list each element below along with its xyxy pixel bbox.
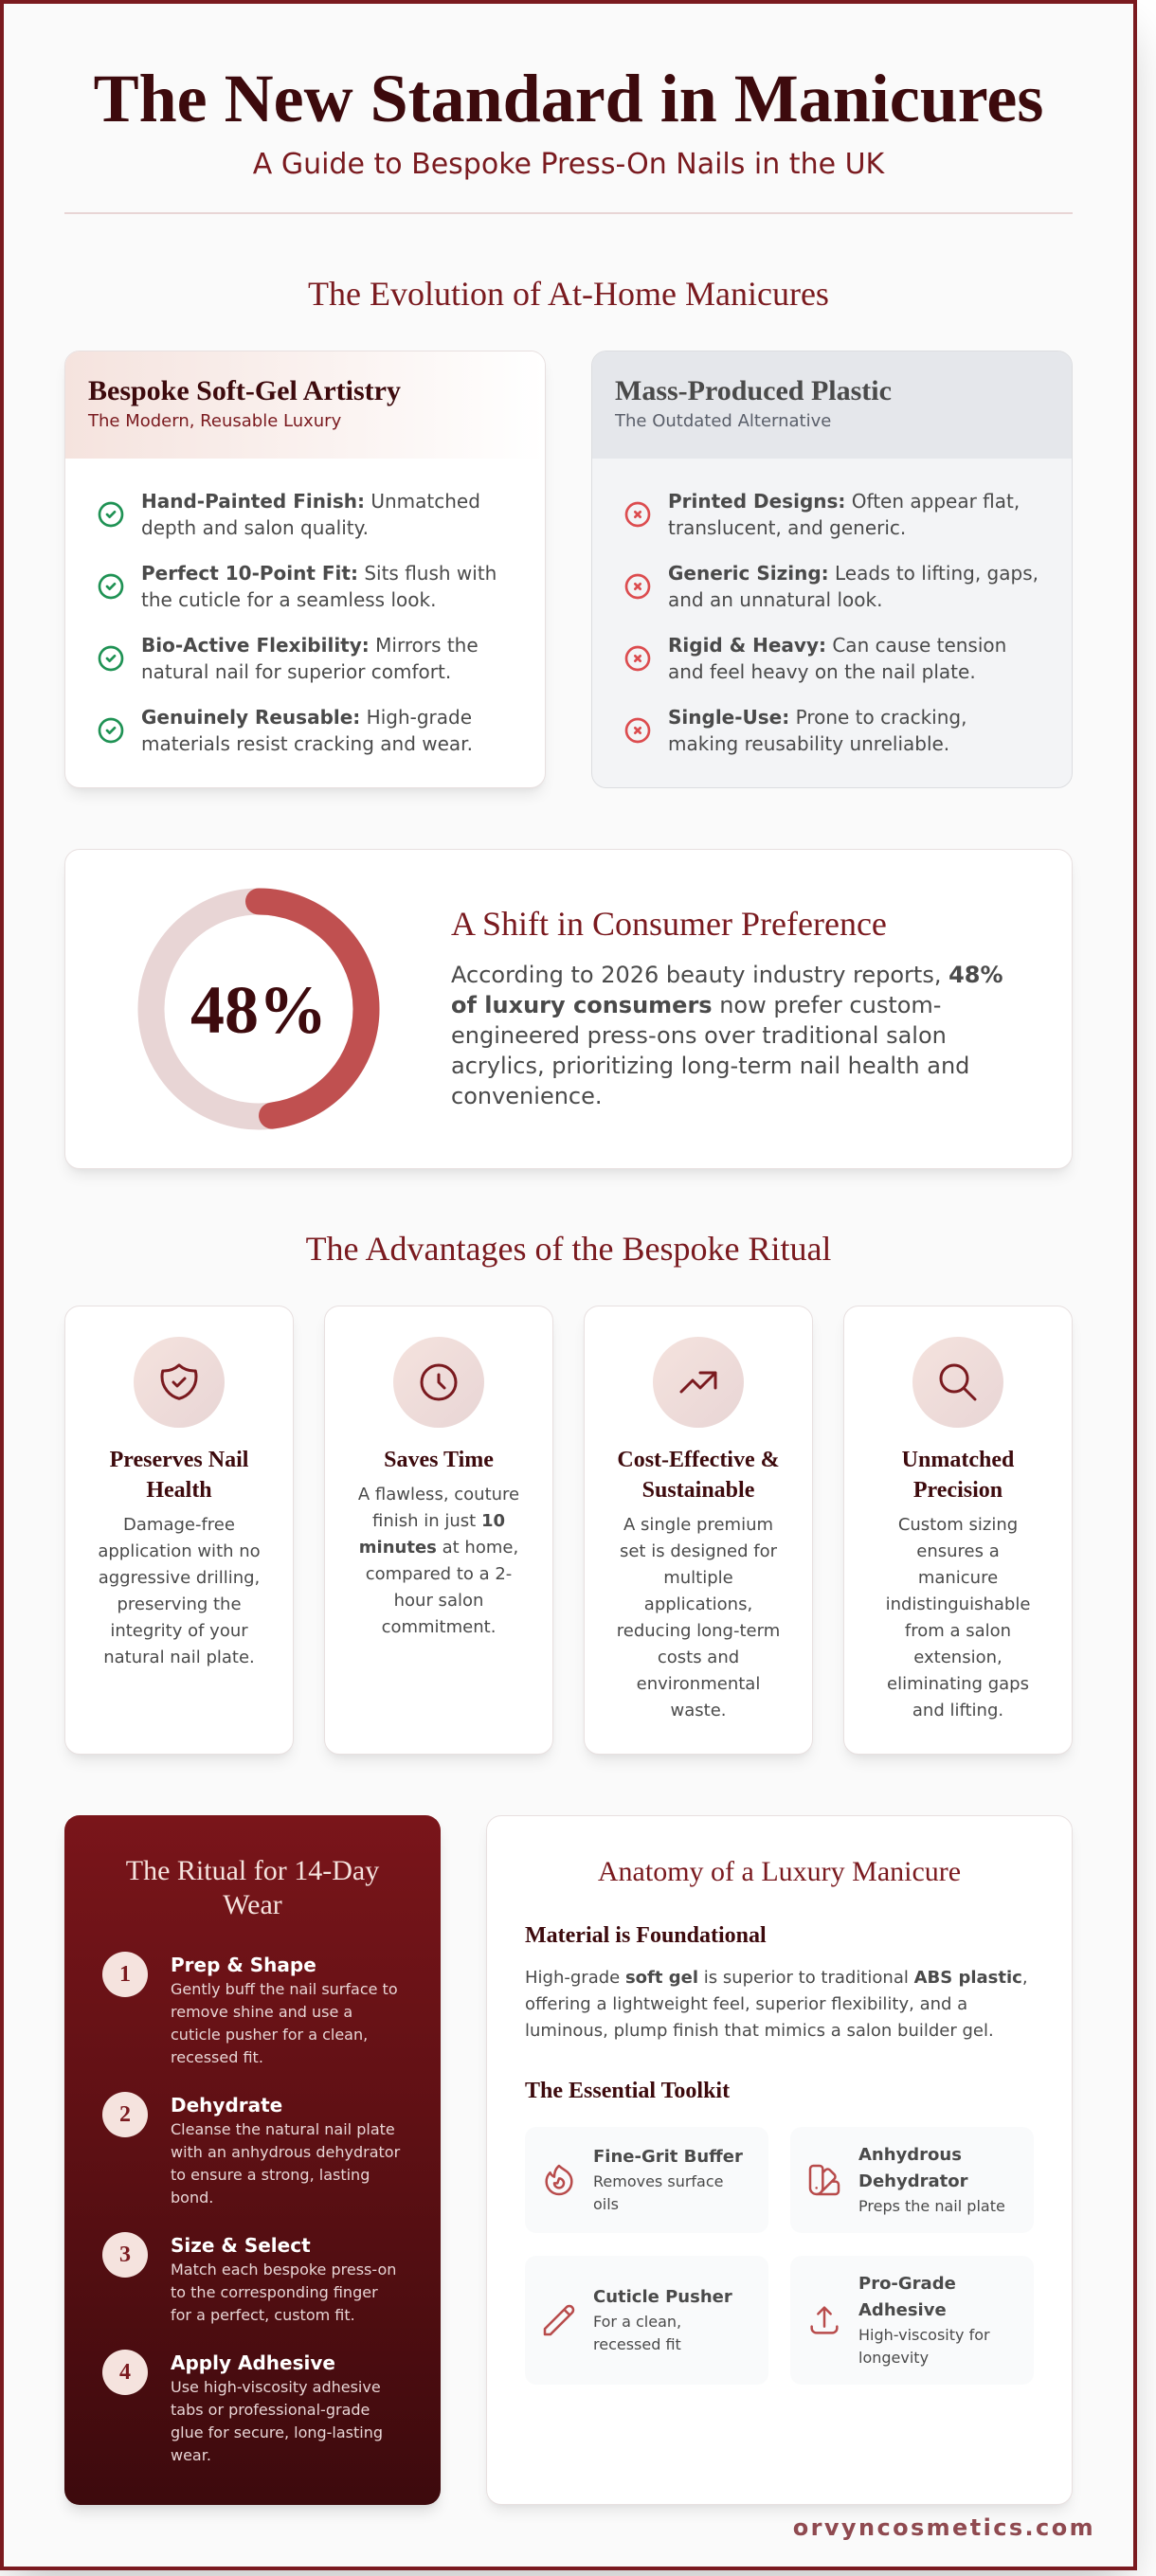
advantage text: reducing long-term xyxy=(617,1621,780,1641)
advantage card: nail health xyxy=(64,1306,294,1755)
panel: ritual steps: cuticle pusher for a clean, xyxy=(171,2026,368,2044)
anatomy heading: Anatomy of a Luxury Manicure xyxy=(598,1856,961,1887)
icon: clock xyxy=(393,1337,484,1428)
title: The New Standard in Manicures xyxy=(94,61,1043,136)
panel: ritual steps: to ensure a strong, lasting xyxy=(171,2166,370,2184)
advantage text: environmental xyxy=(637,1674,760,1694)
drawback: rigid: and feel heavy on the nail plate. xyxy=(668,660,976,683)
panel: ritual steps: glue for secure, long-lasting xyxy=(171,2423,383,2441)
benefit: reusable: Genuinely Reusable: High-grade xyxy=(141,706,472,729)
drawback: single-use xyxy=(625,706,966,755)
step 4 xyxy=(102,2350,383,2464)
advantage text xyxy=(358,1485,519,1637)
advantage title: Unmatched xyxy=(902,1448,1014,1472)
drawback: sizing: Generic Sizing: Leads to lifting, gaps, xyxy=(668,562,1039,585)
step 1 xyxy=(102,1952,398,2066)
advantage title: Sustainable xyxy=(642,1478,754,1503)
bespoke header xyxy=(65,351,545,459)
tool: cuticle pusher: Cuticle Pusher xyxy=(593,2287,732,2307)
stat text: engineered press-ons over traditional salon xyxy=(451,1022,947,1049)
benefit: flexibility xyxy=(99,634,479,683)
advantage title xyxy=(110,1448,248,1503)
plastic header xyxy=(592,351,1072,459)
advantage text: compared to a 2- xyxy=(366,1564,512,1584)
tool: adhesive: Adhesive xyxy=(858,2300,947,2320)
tool: buffer xyxy=(525,2127,768,2233)
advantage title xyxy=(617,1448,780,1503)
drawback: printed: translucent, and generic. xyxy=(668,516,906,539)
tool: buffer: Fine-Grit Buffer xyxy=(593,2147,743,2167)
material heading: Material is Foundational xyxy=(525,1923,767,1948)
panel: ritual steps: 4 xyxy=(119,2360,131,2385)
advantage text: indistinguishable xyxy=(886,1594,1030,1614)
donut chart 48% xyxy=(138,889,379,1129)
advantage text: hour salon xyxy=(394,1591,483,1611)
drawback: printed xyxy=(625,490,1020,539)
advantage text: preserving the xyxy=(117,1594,242,1614)
advantage text: Damage-free xyxy=(123,1515,235,1535)
benefit: reusable: materials resist cracking and wear. xyxy=(141,732,473,755)
panel: ritual steps: Size & Select xyxy=(171,2234,311,2257)
material text: High-grade soft gel is superior to traditional ABS plastic, xyxy=(525,1968,1028,1988)
advantage text: integrity of your xyxy=(110,1621,248,1641)
tool: cuticle pusher: For a clean, xyxy=(593,2313,681,2331)
material text: offering a lightweight feel, superior flexibility, and a xyxy=(525,1994,967,2014)
advantage text: A single premium xyxy=(623,1515,773,1535)
advantage card: cost-effective xyxy=(584,1306,813,1755)
panel: ritual steps: remove shine and use a xyxy=(171,2003,352,2021)
advantage text: set is designed for xyxy=(620,1541,777,1561)
benefit: hand-painted: depth and salon quality. xyxy=(141,516,369,539)
icon: shield xyxy=(134,1337,225,1428)
advantage text: costs and xyxy=(658,1648,739,1667)
tool: adhesive xyxy=(790,2256,1034,2385)
advantage text: natural nail plate. xyxy=(103,1648,255,1667)
advantage text: manicure xyxy=(918,1568,998,1588)
heading: advantages: The Advantages of the Bespoke Ritual xyxy=(306,1230,831,1268)
tool: adhesive: High-viscosity for xyxy=(858,2326,990,2344)
advantage text: from a salon xyxy=(905,1621,1011,1641)
tool: buffer: Removes surface xyxy=(593,2172,723,2190)
advantage text: A flawless, couture xyxy=(358,1485,519,1504)
benefit: reusable xyxy=(99,706,473,755)
advantage text: commitment. xyxy=(382,1617,496,1637)
drawback: single-use: Single-Use: Prone to cracking, xyxy=(668,706,966,729)
benefit: hand-painted xyxy=(99,490,480,539)
ritual heading: The Ritual for 14-Day xyxy=(126,1855,379,1886)
advantage title: Cost-Effective & xyxy=(617,1448,780,1472)
drawback: rigid xyxy=(625,634,1006,683)
advantage text: Custom sizing xyxy=(898,1515,1018,1535)
panel: ritual steps: Use high-viscosity adhesive xyxy=(171,2378,381,2396)
benefit: hand-painted: Hand-Painted Finish: Unmatched xyxy=(141,490,480,513)
ritual heading xyxy=(126,1855,379,1920)
ritual heading: Wear xyxy=(223,1889,282,1920)
advantage text: multiple xyxy=(663,1568,733,1588)
icon: trending up xyxy=(653,1337,744,1428)
advantage text: waste. xyxy=(671,1701,726,1720)
benefit: flexibility: Bio-Active Flexibility: Mirrors the xyxy=(141,634,479,657)
panel: ritual steps: Prep & Shape xyxy=(171,1954,316,1976)
benefit: perfect fit: the cuticle for a seamless look. xyxy=(141,588,436,611)
advantage text: and lifting. xyxy=(912,1701,1003,1720)
tool: cuticle pusher xyxy=(525,2256,768,2385)
panel: ritual steps: for a perfect, custom fit. xyxy=(171,2306,355,2324)
advantage text: ensures a xyxy=(916,1541,1000,1561)
tool: dehydrator: Anhydrous xyxy=(858,2145,962,2165)
material text xyxy=(525,1968,1028,2041)
panel: ritual steps: to the corresponding finger xyxy=(171,2283,378,2301)
advantage text: extension, xyxy=(913,1648,1002,1667)
advantage title xyxy=(902,1448,1014,1503)
tool: adhesive: Pro-Grade xyxy=(858,2274,956,2294)
advantage text: applications, xyxy=(644,1594,752,1614)
tool: cuticle pusher: recessed fit xyxy=(593,2335,681,2353)
plastic header: Mass-Produced Plastic xyxy=(615,375,892,406)
advantage title: Health xyxy=(146,1478,212,1503)
heading: evolution: The Evolution of At-Home Manicures xyxy=(308,275,829,313)
drawback: rigid: Rigid & Heavy: Can cause tension xyxy=(668,634,1006,657)
drawback: printed: Printed Designs: Often appear flat, xyxy=(668,490,1020,513)
benefit: perfect fit: Perfect 10-Point Fit: Sits flush with xyxy=(141,562,497,585)
plastic header: The Outdated Alternative xyxy=(615,411,831,431)
panel: ritual steps: Dehydrate xyxy=(171,2094,282,2117)
stat text: According to 2026 beauty industry reports, 48% xyxy=(451,962,1003,988)
panel: ritual steps: wear. xyxy=(171,2446,211,2464)
step 2 xyxy=(102,2092,400,2207)
bespoke header: Bespoke Soft-Gel Artistry xyxy=(88,375,401,406)
subtitle: A Guide to Bespoke Press-On Nails in the UK xyxy=(253,148,884,181)
panel: bespoke soft-gel artistry xyxy=(64,351,546,788)
advantage title: Preserves Nail xyxy=(110,1448,248,1472)
panel: ritual steps: 1 xyxy=(119,1962,131,1987)
tool: dehydrator xyxy=(790,2127,1034,2233)
panel: ritual steps: bond. xyxy=(171,2189,213,2207)
advantage text: eliminating gaps xyxy=(887,1674,1029,1694)
advantage title: Precision xyxy=(913,1478,1002,1503)
panel: ritual steps: tabs or professional-grade xyxy=(171,2401,370,2419)
panel: ritual steps xyxy=(64,1815,441,2505)
advantage card: saves time xyxy=(324,1306,553,1755)
advantage text: aggressive drilling, xyxy=(99,1568,260,1588)
tool: adhesive: longevity xyxy=(858,2349,929,2367)
advantage text xyxy=(617,1515,780,1720)
bespoke header: The Modern, Reusable Luxury xyxy=(88,411,341,431)
tool: buffer: oils xyxy=(593,2195,619,2213)
advantage text xyxy=(98,1515,261,1667)
benefit: perfect fit xyxy=(99,562,497,611)
drawback: sizing xyxy=(625,562,1039,611)
advantage text: finish in just 10 xyxy=(372,1511,505,1531)
icon: magnifier xyxy=(912,1337,1003,1428)
panel: consumer preference stat xyxy=(64,849,1073,1169)
panel: ritual steps: Cleanse the natural nail plate xyxy=(171,2120,395,2138)
advantage text: application with no xyxy=(98,1541,261,1561)
stat text: convenience. xyxy=(451,1083,603,1109)
panel: anatomy of a luxury manicure xyxy=(486,1815,1073,2505)
panel: mass-produced plastic xyxy=(591,351,1073,788)
panel: ritual steps: with an anhydrous dehydrator xyxy=(171,2143,400,2161)
panel: ritual steps: Apply Adhesive xyxy=(171,2351,335,2374)
panel: ritual steps: recessed fit. xyxy=(171,2048,263,2066)
stat heading: A Shift in Consumer Preference xyxy=(451,905,887,943)
panel: ritual steps: 3 xyxy=(119,2243,131,2267)
material text: luminous, plump finish that mimics a salon builder gel. xyxy=(525,2021,994,2041)
tool: dehydrator: Dehydrator xyxy=(858,2171,967,2191)
advantage card: precision xyxy=(843,1306,1073,1755)
stat text: acrylics, prioritizing long-term nail health and xyxy=(451,1053,969,1079)
drawback: single-use: making reusability unreliable. xyxy=(668,732,949,755)
benefit: flexibility: natural nail for superior comfort. xyxy=(141,660,451,683)
advantage text xyxy=(886,1515,1030,1720)
drawback: sizing: and an unnatural look. xyxy=(668,588,882,611)
panel: ritual steps: Gently buff the nail surface to xyxy=(171,1980,398,1998)
stat text xyxy=(451,962,1003,1109)
advantage title: Saves Time xyxy=(384,1448,494,1472)
footer brand: orvyncosmetics.com xyxy=(793,2514,1095,2541)
advantage text: minutes at home, xyxy=(359,1538,518,1558)
panel: ritual steps: 2 xyxy=(119,2102,131,2127)
toolkit heading: The Essential Toolkit xyxy=(525,2079,730,2103)
step 3 xyxy=(102,2232,396,2324)
panel: ritual steps: Match each bespoke press-on xyxy=(171,2261,396,2279)
donut chart 48%: 48% xyxy=(190,972,327,1048)
stat text: of luxury consumers now prefer custom- xyxy=(451,992,941,1018)
tool: dehydrator: Preps the nail plate xyxy=(858,2197,1005,2215)
